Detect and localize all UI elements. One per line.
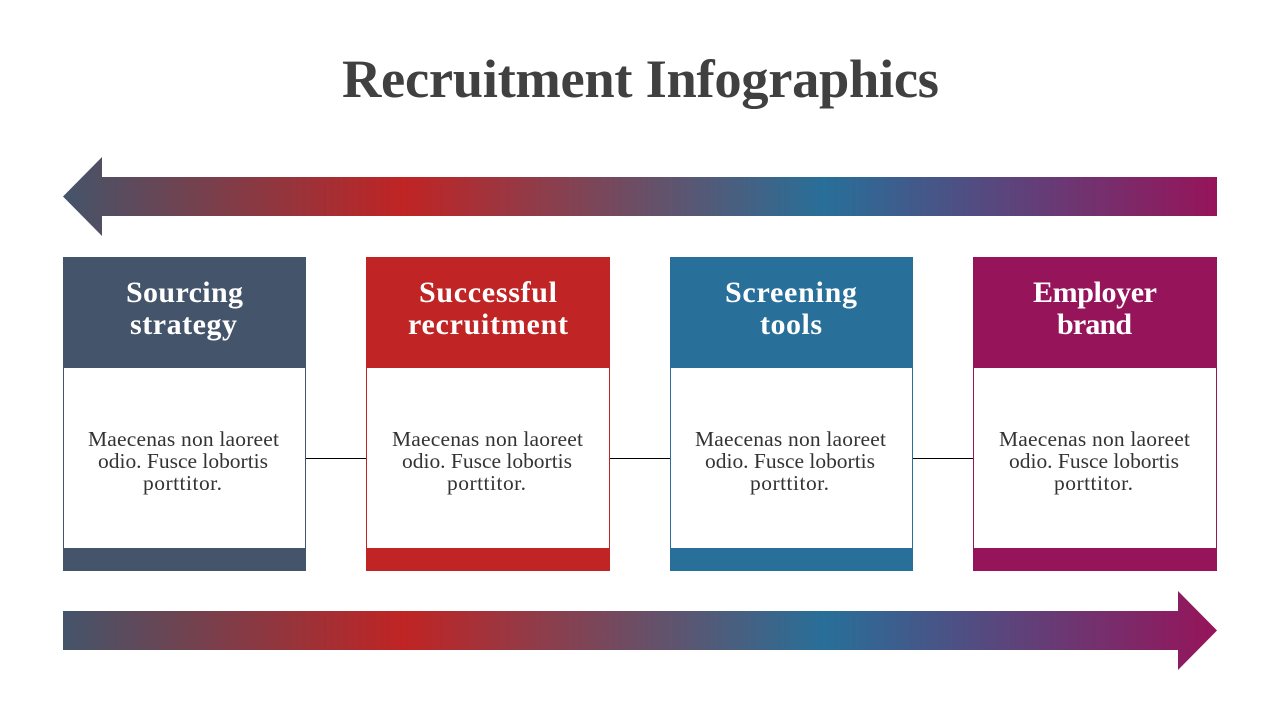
panel: Employer brand bbox=[973, 257, 1217, 571]
connector: card 3 to card 4 bbox=[913, 458, 973, 460]
card 2 body bbox=[366, 258, 610, 570]
card 4 text: Maecenas non laoreet bbox=[999, 427, 1190, 451]
card 2 text: odio. Fusce lobortis bbox=[402, 449, 572, 473]
card 1 header bbox=[63, 257, 306, 368]
card 1 text: odio. Fusce lobortis bbox=[98, 449, 268, 473]
card 4 text: porttitor. bbox=[1054, 471, 1133, 495]
card 3 text: porttitor. bbox=[750, 471, 829, 495]
card 2 text: Maecenas non laoreet bbox=[392, 427, 583, 451]
card 2 header bbox=[366, 257, 610, 368]
card 3 text: odio. Fusce lobortis bbox=[705, 449, 875, 473]
card 2 text: porttitor. bbox=[447, 471, 526, 495]
card 3 text: Maecenas non laoreet bbox=[695, 427, 886, 451]
card 1 text: Maecenas non laoreet bbox=[88, 427, 279, 451]
card 2 heading: Successful bbox=[419, 276, 557, 309]
panel: Sourcing strategy bbox=[63, 257, 306, 571]
connector: card 2 to card 3 bbox=[610, 458, 670, 460]
card 4 text: odio. Fusce lobortis bbox=[1009, 449, 1179, 473]
card 4 header bbox=[973, 257, 1217, 368]
card 4 footer bbox=[973, 548, 1217, 571]
arrow: bottom, pointing right bbox=[63, 591, 1217, 670]
card 2 footer bbox=[366, 548, 610, 571]
card 4 heading: brand bbox=[1057, 308, 1132, 341]
card 4 body bbox=[974, 258, 1216, 570]
connector: card 1 to card 2 bbox=[306, 458, 366, 460]
card 3 heading: tools bbox=[760, 308, 822, 341]
card 1 footer bbox=[63, 548, 306, 571]
card 1 heading: Sourcing bbox=[126, 276, 243, 309]
card 4 heading: Employer bbox=[1033, 276, 1157, 309]
card 3 footer bbox=[670, 548, 913, 571]
panel: Successful recruitment bbox=[366, 257, 610, 571]
card 3 header bbox=[670, 257, 913, 368]
card 3 body bbox=[670, 258, 912, 570]
panel: Screening tools bbox=[670, 257, 913, 571]
card 1 heading: strategy bbox=[130, 308, 237, 341]
arrow: top, pointing left bbox=[63, 157, 1217, 236]
card 1 body bbox=[64, 258, 306, 570]
card 2 heading: recruitment bbox=[408, 308, 568, 341]
card 1 text: porttitor. bbox=[143, 471, 222, 495]
title: Recruitment Infographics bbox=[342, 48, 939, 109]
card 3 heading: Screening bbox=[725, 276, 857, 309]
